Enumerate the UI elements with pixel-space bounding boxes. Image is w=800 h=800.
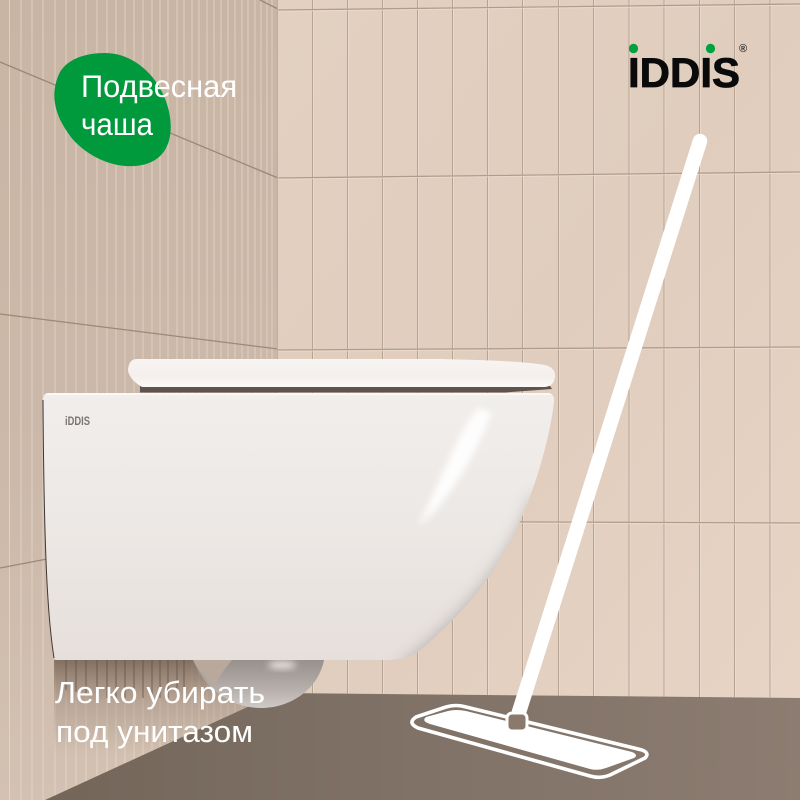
toilet bowl (40, 390, 560, 668)
mop handle (519, 141, 700, 712)
icon: mop (412, 141, 700, 777)
label: hanging bowl: Подвесная (81, 68, 237, 104)
background: left tiled wall (0, 0, 279, 800)
mop head outline (412, 706, 647, 777)
caption: easy to clean under the toilet: Легко убирать (55, 675, 265, 710)
brand mark on bowl: iDDIS (65, 416, 90, 428)
label: hanging bowl: чаша (81, 106, 153, 142)
badge: green blob with label (54, 53, 237, 166)
toilet (40, 359, 560, 708)
logo: IDDIS (628, 43, 747, 96)
logo dots (629, 44, 715, 53)
caption: easy to clean under the toilet: под унитазом (56, 714, 253, 749)
seat hinge gap (140, 386, 552, 392)
mop pad (424, 710, 636, 770)
background: right tiled wall (278, 0, 800, 700)
toilet seat (128, 359, 555, 387)
toilet siphon (193, 660, 324, 708)
green blob (54, 53, 171, 166)
floor (45, 693, 800, 800)
logo wordmark: IDDIS (628, 49, 740, 96)
registered mark: ® (739, 43, 747, 55)
mop socket (507, 713, 527, 731)
